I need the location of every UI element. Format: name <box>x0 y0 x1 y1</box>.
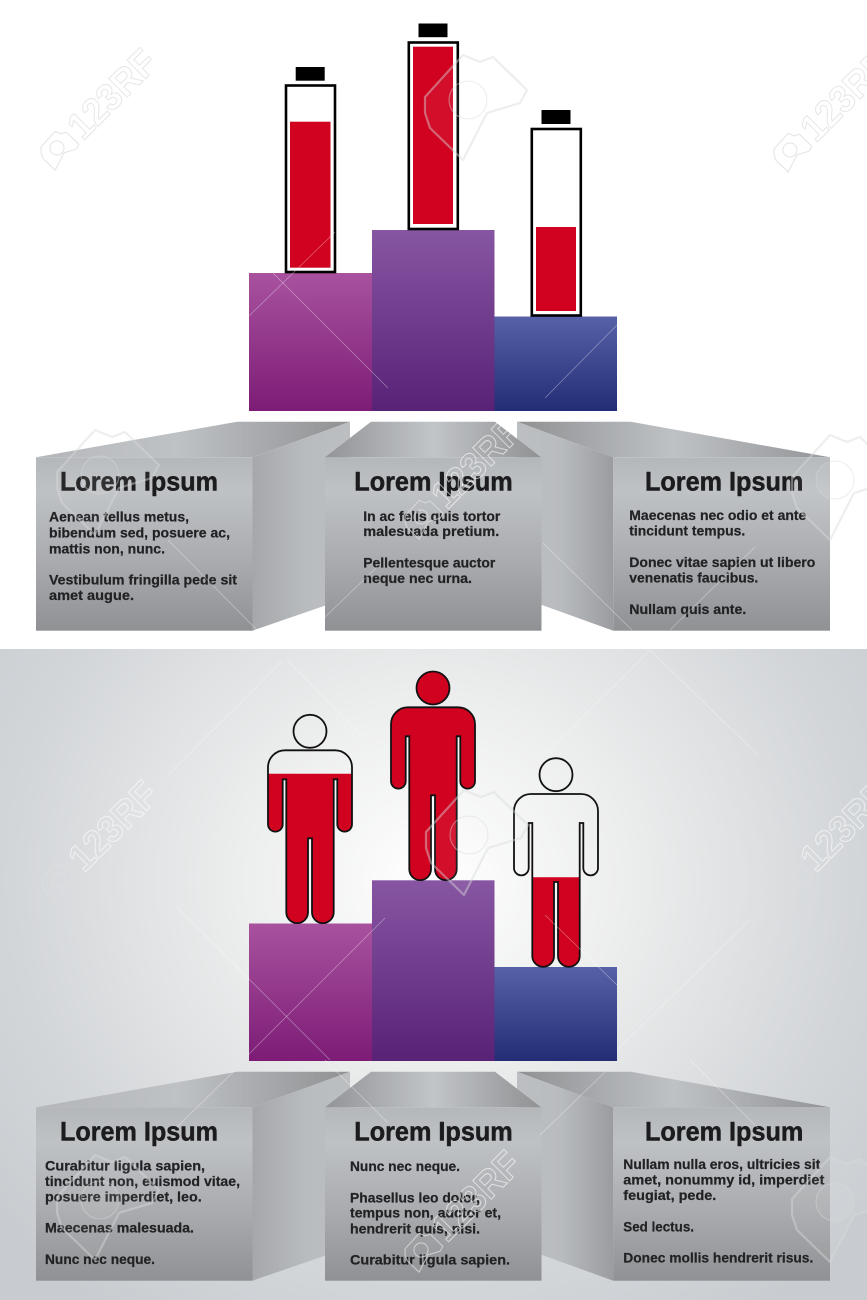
text block: amet, nonummy id, imperdiet <box>623 1171 825 1187</box>
text block: Nullam quis ante. <box>629 601 746 617</box>
text block <box>350 1158 510 1267</box>
podium: left purple <box>249 273 372 411</box>
watermark: 123RF logos: 123RF <box>424 411 530 517</box>
podium: right blue <box>494 967 617 1061</box>
text block: Nullam nulla eros, ultricies sit <box>623 1156 821 1172</box>
heading: Lorem Ipsum <box>645 1117 803 1147</box>
text block: Nunc nec neque. <box>45 1251 155 1267</box>
text block: Aenean tellus metus, <box>49 509 189 525</box>
box: upper middle <box>325 422 542 631</box>
icon: right person partly filled <box>514 758 598 967</box>
text block: Sed lectus. <box>623 1218 694 1234</box>
box: upper right <box>517 422 830 631</box>
heading: Lorem Ipsum <box>645 467 803 497</box>
background: white upper panel <box>0 0 867 649</box>
podium: middle violet <box>372 230 494 411</box>
watermark: 123RF logos: 123RF <box>60 42 166 148</box>
icon: middle person fully filled <box>391 672 475 880</box>
icon: left person partly filled <box>268 715 352 923</box>
text block <box>363 508 501 586</box>
text block <box>49 509 237 603</box>
panel: upper three info boxes <box>36 422 830 631</box>
text block: Curabitur ligula sapien, <box>45 1158 205 1174</box>
text block: hendrerit quis, nisi. <box>350 1220 480 1236</box>
text block: posuere imperdiet, leo. <box>45 1189 202 1205</box>
text block: Maecenas malesuada. <box>45 1220 194 1236</box>
text block: bibendum sed, posuere ac, <box>49 525 230 541</box>
box: lower right <box>517 1072 830 1281</box>
podium: middle violet <box>372 880 494 1061</box>
text block: malesuada pretium. <box>363 523 499 539</box>
icon: left battery <box>286 67 335 272</box>
heading: Lorem Ipsum <box>354 467 513 497</box>
box: upper left <box>36 422 350 631</box>
text block: feugiat, pede. <box>623 1187 716 1203</box>
watermark: thin crossing lines <box>168 232 758 1135</box>
watermark: 123RF logos: 123RF <box>424 1144 530 1250</box>
icon: right battery <box>532 110 581 316</box>
text block: Donec vitae sapien ut libero <box>629 554 815 570</box>
panel: lower three info boxes <box>36 1072 830 1281</box>
podium: right blue <box>494 316 617 411</box>
box: lower left <box>36 1072 350 1281</box>
heading: Lorem Ipsum <box>60 467 218 497</box>
text block: Maecenas nec odio et ante <box>629 507 806 523</box>
text block: Phasellus leo dolor, <box>350 1189 480 1205</box>
text block: Pellentesque auctor <box>363 555 496 571</box>
text block <box>623 1156 825 1265</box>
text block: Vestibulum fringilla pede sit <box>49 571 237 587</box>
panel: battery podium chart <box>249 24 617 411</box>
text block: Curabitur ligula sapien. <box>350 1251 510 1267</box>
text block: Nunc nec neque. <box>350 1158 460 1174</box>
text block: neque nec urna. <box>363 570 472 586</box>
background: grey radial lower panel <box>0 649 867 1300</box>
watermark: 123RF logos: 123RF <box>61 774 167 880</box>
text block <box>45 1158 240 1267</box>
text block: tincidunt tempus. <box>629 523 745 539</box>
text block: tempus non, auctor et, <box>350 1205 501 1221</box>
text block <box>629 507 815 617</box>
text block: amet augue. <box>49 587 134 603</box>
text block: mattis non, nunc. <box>49 540 165 556</box>
text block: Donec mollis hendrerit risus. <box>623 1249 813 1265</box>
podium: left purple <box>249 924 372 1061</box>
box: lower middle <box>325 1072 542 1281</box>
icon: middle battery <box>409 24 458 229</box>
text block: tincidunt non, euismod vitae, <box>45 1173 240 1189</box>
text block: venenatis faucibus. <box>629 570 758 586</box>
text block: In ac felis quis tortor <box>363 508 501 524</box>
heading: Lorem Ipsum <box>60 1117 218 1147</box>
heading: Lorem Ipsum <box>354 1117 513 1147</box>
panel: people podium chart <box>249 672 617 1061</box>
